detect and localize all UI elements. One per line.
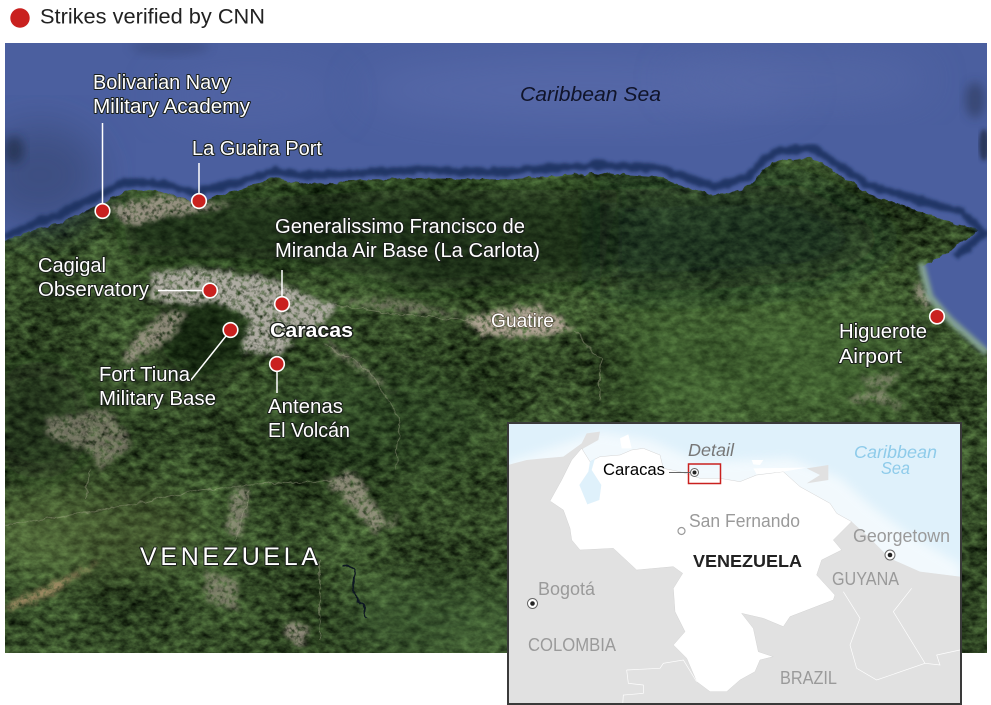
inset country: COLOMBIA: COLOMBIA [528,635,616,655]
marker: Antenas El Volcán: El Volcán [268,420,350,442]
marker: La Guaira Port: La Guaira Port [192,138,322,160]
marker: Cagigal Observatory: Cagigal [38,255,106,277]
inset country: GUYANA: GUYANA [832,569,899,589]
inset frame [508,423,961,704]
inset sea label: Caribbean [854,442,937,462]
inset city: Caracas [603,461,698,479]
legend: strikes verified by CNN: Strikes verified by CNN [40,6,265,28]
marker: Antenas El Volcán [268,357,350,442]
place label: Guatire: Guatire [491,311,554,332]
Paraguana peninsula and islands [620,434,807,474]
roads [5,305,600,640]
marker: Bolivarian Navy Military Academy [93,72,250,218]
inset country: BRAZIL: BRAZIL [780,668,837,688]
Trinidad [807,465,828,483]
marker: Bolivarian Navy Military Academy: Military Academy [93,96,250,118]
Lake Maracaibo [579,458,601,504]
marker: Higuerote Airport [839,309,944,368]
marker: Bolivarian Navy Military Academy: Bolivarian Navy [93,72,231,94]
inset city: Caracas: Caracas [603,461,665,479]
country label: VENEZUELA: VENEZUELA [140,543,318,571]
inset city: San Fernando: San Fernando [689,511,800,531]
urban areas and bare ground [5,195,935,645]
marker: Higuerote Airport: Higuerote [839,321,927,343]
inset country: VENEZUELA: VENEZUELA [693,551,802,571]
inset locator map [508,423,961,705]
inset label: Detail: Detail [688,440,735,460]
marker: Cagigal Observatory: Observatory [38,279,149,301]
inset city: Bogotá: Bogotá [538,579,596,599]
marker: Antenas El Volcán: Antenas [268,396,343,418]
marker: La Guaira Port [192,138,322,208]
inset locator map: Sea [881,458,910,478]
marker: Generalissimo Francisco de Miranda Air Base: Miranda Air Base (La Carlota) [275,240,540,262]
city label: Caracas: Caracas [270,320,353,342]
marker: Higuerote Airport: Airport [839,346,902,368]
terrain base [5,156,987,653]
marker: Fort Tiuna Military Base [99,323,238,410]
sea [5,43,987,357]
marker: Cagigal Observatory [38,255,217,301]
inset coastal glow [509,432,960,576]
Venezuela [550,448,852,692]
inset detail rectangle [688,464,720,484]
inset city: Bogotá [528,579,596,608]
inset city: Georgetown [853,526,950,560]
sea label: Caribbean Sea: Caribbean Sea [520,84,661,106]
internal borders [623,588,960,705]
neighbouring land: Colombia, Guyana, Brazil [508,432,960,705]
marker: Generalissimo Francisco de Miranda Air Base: Generalissimo Francisco de [275,216,525,238]
inset city: Georgetown: Georgetown [853,526,950,546]
marker: Fort Tiuna Military Base: Military Base [99,388,216,410]
marker: Fort Tiuna Military Base: Fort Tiuna [99,364,191,386]
terrain shading [0,185,900,660]
marker: Generalissimo Francisco de Miranda Air Base [275,216,540,311]
reservoir [342,565,367,618]
